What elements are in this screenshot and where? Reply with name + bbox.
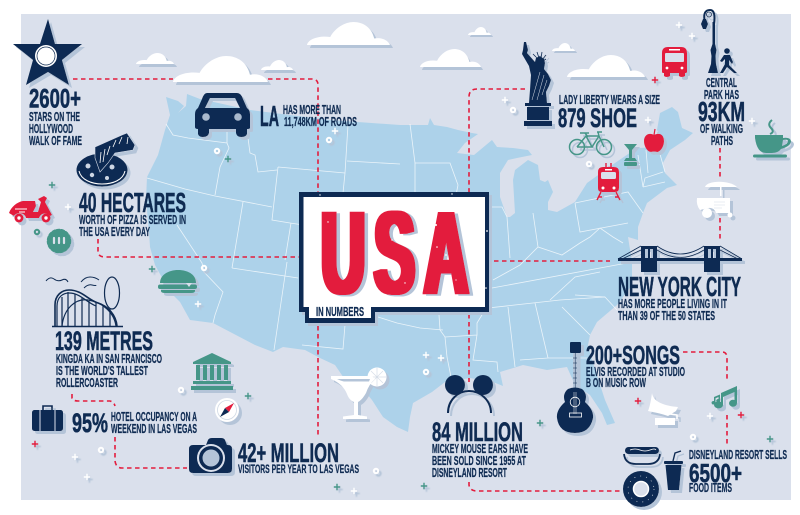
stat: mickey ears: DISNEYLAND RESORT [432, 465, 507, 480]
stat: disneyland food: 6500+ [689, 458, 742, 488]
icon: suitcase [32, 406, 63, 431]
stat: rollercoaster [55, 326, 162, 390]
icon: temple [191, 353, 233, 390]
stat: central park: PATHS [711, 133, 733, 148]
stat: lady liberty [558, 92, 660, 133]
icon: green badge [48, 230, 70, 252]
icon: statue of liberty [522, 42, 552, 126]
stat: mickey ears: MICKEY MOUSE EARS HAVE [432, 441, 528, 456]
dashed connector lines [72, 79, 727, 491]
stat: hotel occupancy: HOTEL OCCUPANCY ON A [111, 409, 197, 424]
subtitle: in numbers: IN NUMBERS [316, 305, 364, 319]
icon: bicycle [570, 132, 612, 154]
icon: hot dog [624, 447, 660, 464]
stat: pizza hectares: WORTH OF PIZZA IS SERVED IN [79, 212, 186, 227]
stat: elvis songs: B ON MUSIC ROW [586, 375, 646, 390]
stat: hotel occupancy: 95% [72, 408, 108, 438]
stat: las vegas visitors: 42+ MILLION [238, 438, 339, 468]
stat: LA roads: LA [260, 101, 279, 133]
icon: margarita [331, 368, 386, 419]
stat: elvis songs: ELVIS RECORDED AT STUDIO [586, 364, 685, 379]
clouds [136, 22, 648, 85]
stat: new york city: THAN 39 OF THE 50 STATES [618, 308, 715, 323]
stat: rollercoaster: IS THE WORLD'S TALLEST [56, 363, 148, 378]
stat: las vegas visitors [238, 438, 359, 476]
icon: bus [662, 47, 687, 77]
stat: lady liberty: LADY LIBERTY WEARS A SIZE [559, 92, 660, 107]
title: USA: USA [321, 187, 468, 319]
icon: car [195, 93, 250, 137]
icon: soda cup [664, 451, 683, 490]
stat: pizza hectares [79, 187, 186, 239]
icon: music notes [712, 386, 737, 408]
stat: walk of fame [29, 84, 82, 148]
stat: central park: OF WALKING [700, 121, 743, 136]
stat: pizza hectares: THE USA EVERY DAY [79, 224, 150, 239]
stat: LA roads: 11,748KM OF ROADS [284, 114, 357, 129]
icon: mickey ears [445, 375, 493, 413]
stat: walk of fame: 2600+ [29, 84, 81, 114]
stat: elvis songs: 200+SONGS [586, 340, 680, 370]
stat: central park: PARK HAS [704, 87, 739, 102]
icon: camera [189, 438, 232, 473]
stat: elvis songs [586, 340, 685, 390]
icon: brooklyn bridge [618, 246, 742, 272]
stat: hotel occupancy: WEEKEND IN LAS VEGAS [111, 421, 197, 436]
stat: las vegas visitors: VISITORS PER YEAR TO LAS VEGAS [238, 462, 359, 476]
stat: walk of fame: STARS ON THE [29, 109, 80, 124]
stat: rollercoaster: ROLLERCOASTER [56, 375, 118, 390]
map of the USA [146, 94, 693, 432]
stat: central park: CENTRAL [706, 75, 737, 90]
stat: LA roads [260, 101, 357, 133]
stat: rollercoaster: KINGDA KA IN SAN FRANCISCO [56, 351, 162, 366]
icon: rollercoaster [46, 277, 123, 326]
icon: guitar [557, 342, 593, 433]
icon: walking person [720, 48, 737, 73]
icon: donut [623, 471, 659, 507]
stat: pizza hectares: 40 HECTARES [79, 187, 186, 218]
stat: hotel occupancy [72, 408, 197, 438]
stat: mickey ears: 84 MILLION [432, 417, 523, 447]
icon: coffee cup [753, 120, 791, 158]
icon: gramophone [648, 393, 678, 425]
stat: rollercoaster: 139 METRES [55, 326, 153, 356]
stat: central park: 93KM [698, 96, 745, 127]
stat: mickey ears: BEEN SOLD SINCE 1955 AT [432, 453, 526, 468]
icon: lamp post [701, 10, 718, 73]
icon: train [597, 163, 620, 200]
stat: LA roads: HAS MORE THAN [283, 102, 341, 117]
icon: fountain [624, 144, 637, 166]
stat: walk of fame: HOLLYWOOD [29, 121, 73, 136]
stat: new york city [618, 271, 741, 323]
icon: hollywood star [13, 19, 82, 85]
icon: pizza [76, 133, 135, 186]
icon: scooter [9, 196, 52, 222]
stat: disneyland food [689, 447, 787, 495]
stat: mickey ears [432, 417, 528, 480]
icon: burger [158, 270, 197, 293]
stat: disneyland food: FOOD ITEMS [689, 481, 732, 495]
stat: central park [698, 75, 745, 148]
icon: compass [215, 398, 239, 422]
usa title box [299, 187, 489, 323]
icon: food cart [697, 182, 737, 218]
stat: lady liberty: 879 SHOE [558, 103, 637, 133]
icon: apple [644, 129, 664, 152]
stat: walk of fame: WALK OF FAME [29, 133, 82, 148]
